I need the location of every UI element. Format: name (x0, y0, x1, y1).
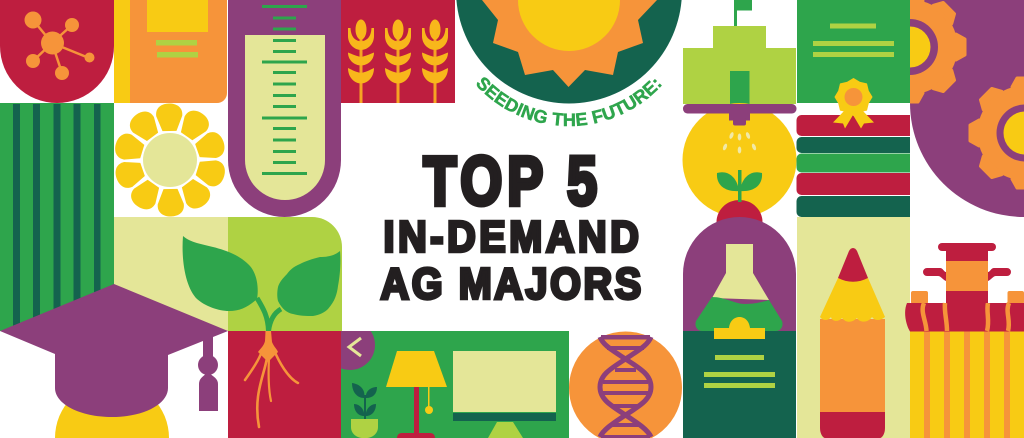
icon: flower (112, 103, 228, 217)
title line 3: AG MAJORS (380, 259, 644, 308)
leaves and stem (183, 236, 340, 331)
panel: flask arch (683, 217, 796, 331)
sprinkler head (683, 104, 796, 126)
monitor (453, 351, 556, 438)
panel: seedling with roots (114, 217, 342, 438)
panel: dark green card (683, 317, 796, 438)
soil mound (716, 200, 762, 244)
title: TOP 5 (424, 143, 602, 220)
icon: award ribbon (833, 78, 874, 128)
water drops (722, 132, 757, 154)
cap tassel (198, 335, 218, 411)
card lines (704, 355, 775, 388)
panel: building with sprinkler (683, 0, 796, 104)
icon: DNA helix (569, 331, 682, 438)
panel: book (114, 0, 227, 103)
panel: diploma (797, 0, 910, 103)
back button circle (341, 331, 375, 370)
title (380, 143, 644, 308)
potted plant (351, 383, 378, 438)
panel: room with lamp and monitor (341, 331, 569, 438)
panel: yellow circle with sprout (682, 103, 796, 244)
panel: molecule (0, 0, 114, 103)
icon: graduation cap (0, 284, 228, 438)
tower (923, 243, 1011, 331)
wheat stalks (348, 20, 448, 103)
panel: green stripes (0, 103, 114, 331)
lamp (386, 351, 447, 438)
panel: test tube (228, 0, 341, 217)
gear left (910, 0, 966, 104)
panel: stacked books (796, 115, 910, 217)
panel: gears (910, 0, 1024, 217)
panel: sun (456, 0, 682, 104)
panel: wheat (341, 0, 455, 103)
chevron (349, 338, 361, 356)
roots (245, 331, 298, 427)
gear right (970, 78, 1024, 188)
panel: pencil (797, 217, 910, 438)
title line 2: IN-DEMAND (384, 212, 642, 261)
flask (695, 244, 783, 331)
building (683, 26, 796, 104)
flask stopper (714, 317, 765, 339)
flag (734, 0, 752, 27)
sprout (717, 170, 762, 202)
panel: columned building (905, 243, 1024, 438)
curved tagline: SEEDING THE FUTURE: (476, 77, 662, 126)
roof band (905, 291, 1024, 332)
